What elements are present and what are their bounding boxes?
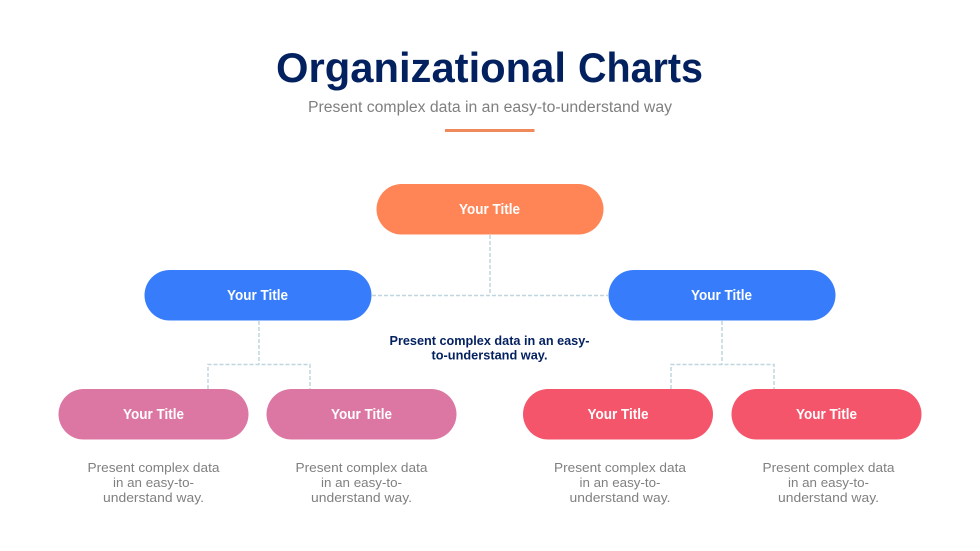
text: pink 2 description: understand way.: [311, 490, 412, 505]
text: red 1 description: Present complex data: [554, 460, 687, 475]
node: red 1: Your Title: [588, 407, 648, 423]
connectors: left branch: [208, 321, 310, 389]
node: top orange: Your Title: [459, 202, 520, 218]
text: red 1 description: [554, 460, 687, 505]
text: red 1 description: understand way.: [570, 490, 670, 505]
title: [276, 44, 703, 91]
center description: Present complex data in an easy-: [390, 334, 590, 348]
node: right blue: [608, 270, 836, 320]
subtitle: Present complex data in an easy-to-understand way: [308, 99, 672, 116]
node: pink 1: Your Title: [123, 407, 184, 423]
node: red 2: Your Title: [796, 407, 857, 423]
text: pink 1 description: [88, 460, 220, 505]
title: Organizational: [276, 44, 566, 91]
node: right blue: Your Title: [691, 288, 752, 304]
text: red 2 description: understand way.: [778, 490, 879, 505]
text: red 2 description: in an easy-to-: [788, 475, 869, 490]
text: pink 1 description: in an easy-to-: [113, 475, 194, 490]
text: pink 1 description: understand way.: [103, 490, 204, 505]
text: pink 2 description: Present complex data: [296, 460, 428, 475]
title: Charts: [578, 44, 703, 91]
node: red 1: [523, 389, 713, 440]
node: left blue: [144, 270, 372, 320]
node: top orange: [376, 184, 604, 234]
node: red 2: [732, 389, 922, 440]
connectors: right branch: [671, 321, 774, 389]
node: pink 2: Your Title: [331, 407, 392, 423]
text: red 2 description: Present complex data: [762, 460, 895, 475]
text: pink 2 description: [296, 460, 428, 505]
node: pink 1: [58, 389, 248, 440]
node: pink 2: [266, 389, 456, 440]
node: left blue: Your Title: [227, 288, 288, 304]
center description: to-understand way.: [432, 348, 548, 362]
text: pink 1 description: Present complex data: [88, 460, 220, 475]
text: red 2 description: [762, 460, 895, 505]
center description: [390, 334, 590, 362]
text: red 1 description: in an easy-to-: [580, 475, 660, 490]
text: pink 2 description: in an easy-to-: [321, 475, 402, 490]
title underline accent: [445, 129, 534, 132]
connectors: top level to second level: [372, 235, 608, 296]
